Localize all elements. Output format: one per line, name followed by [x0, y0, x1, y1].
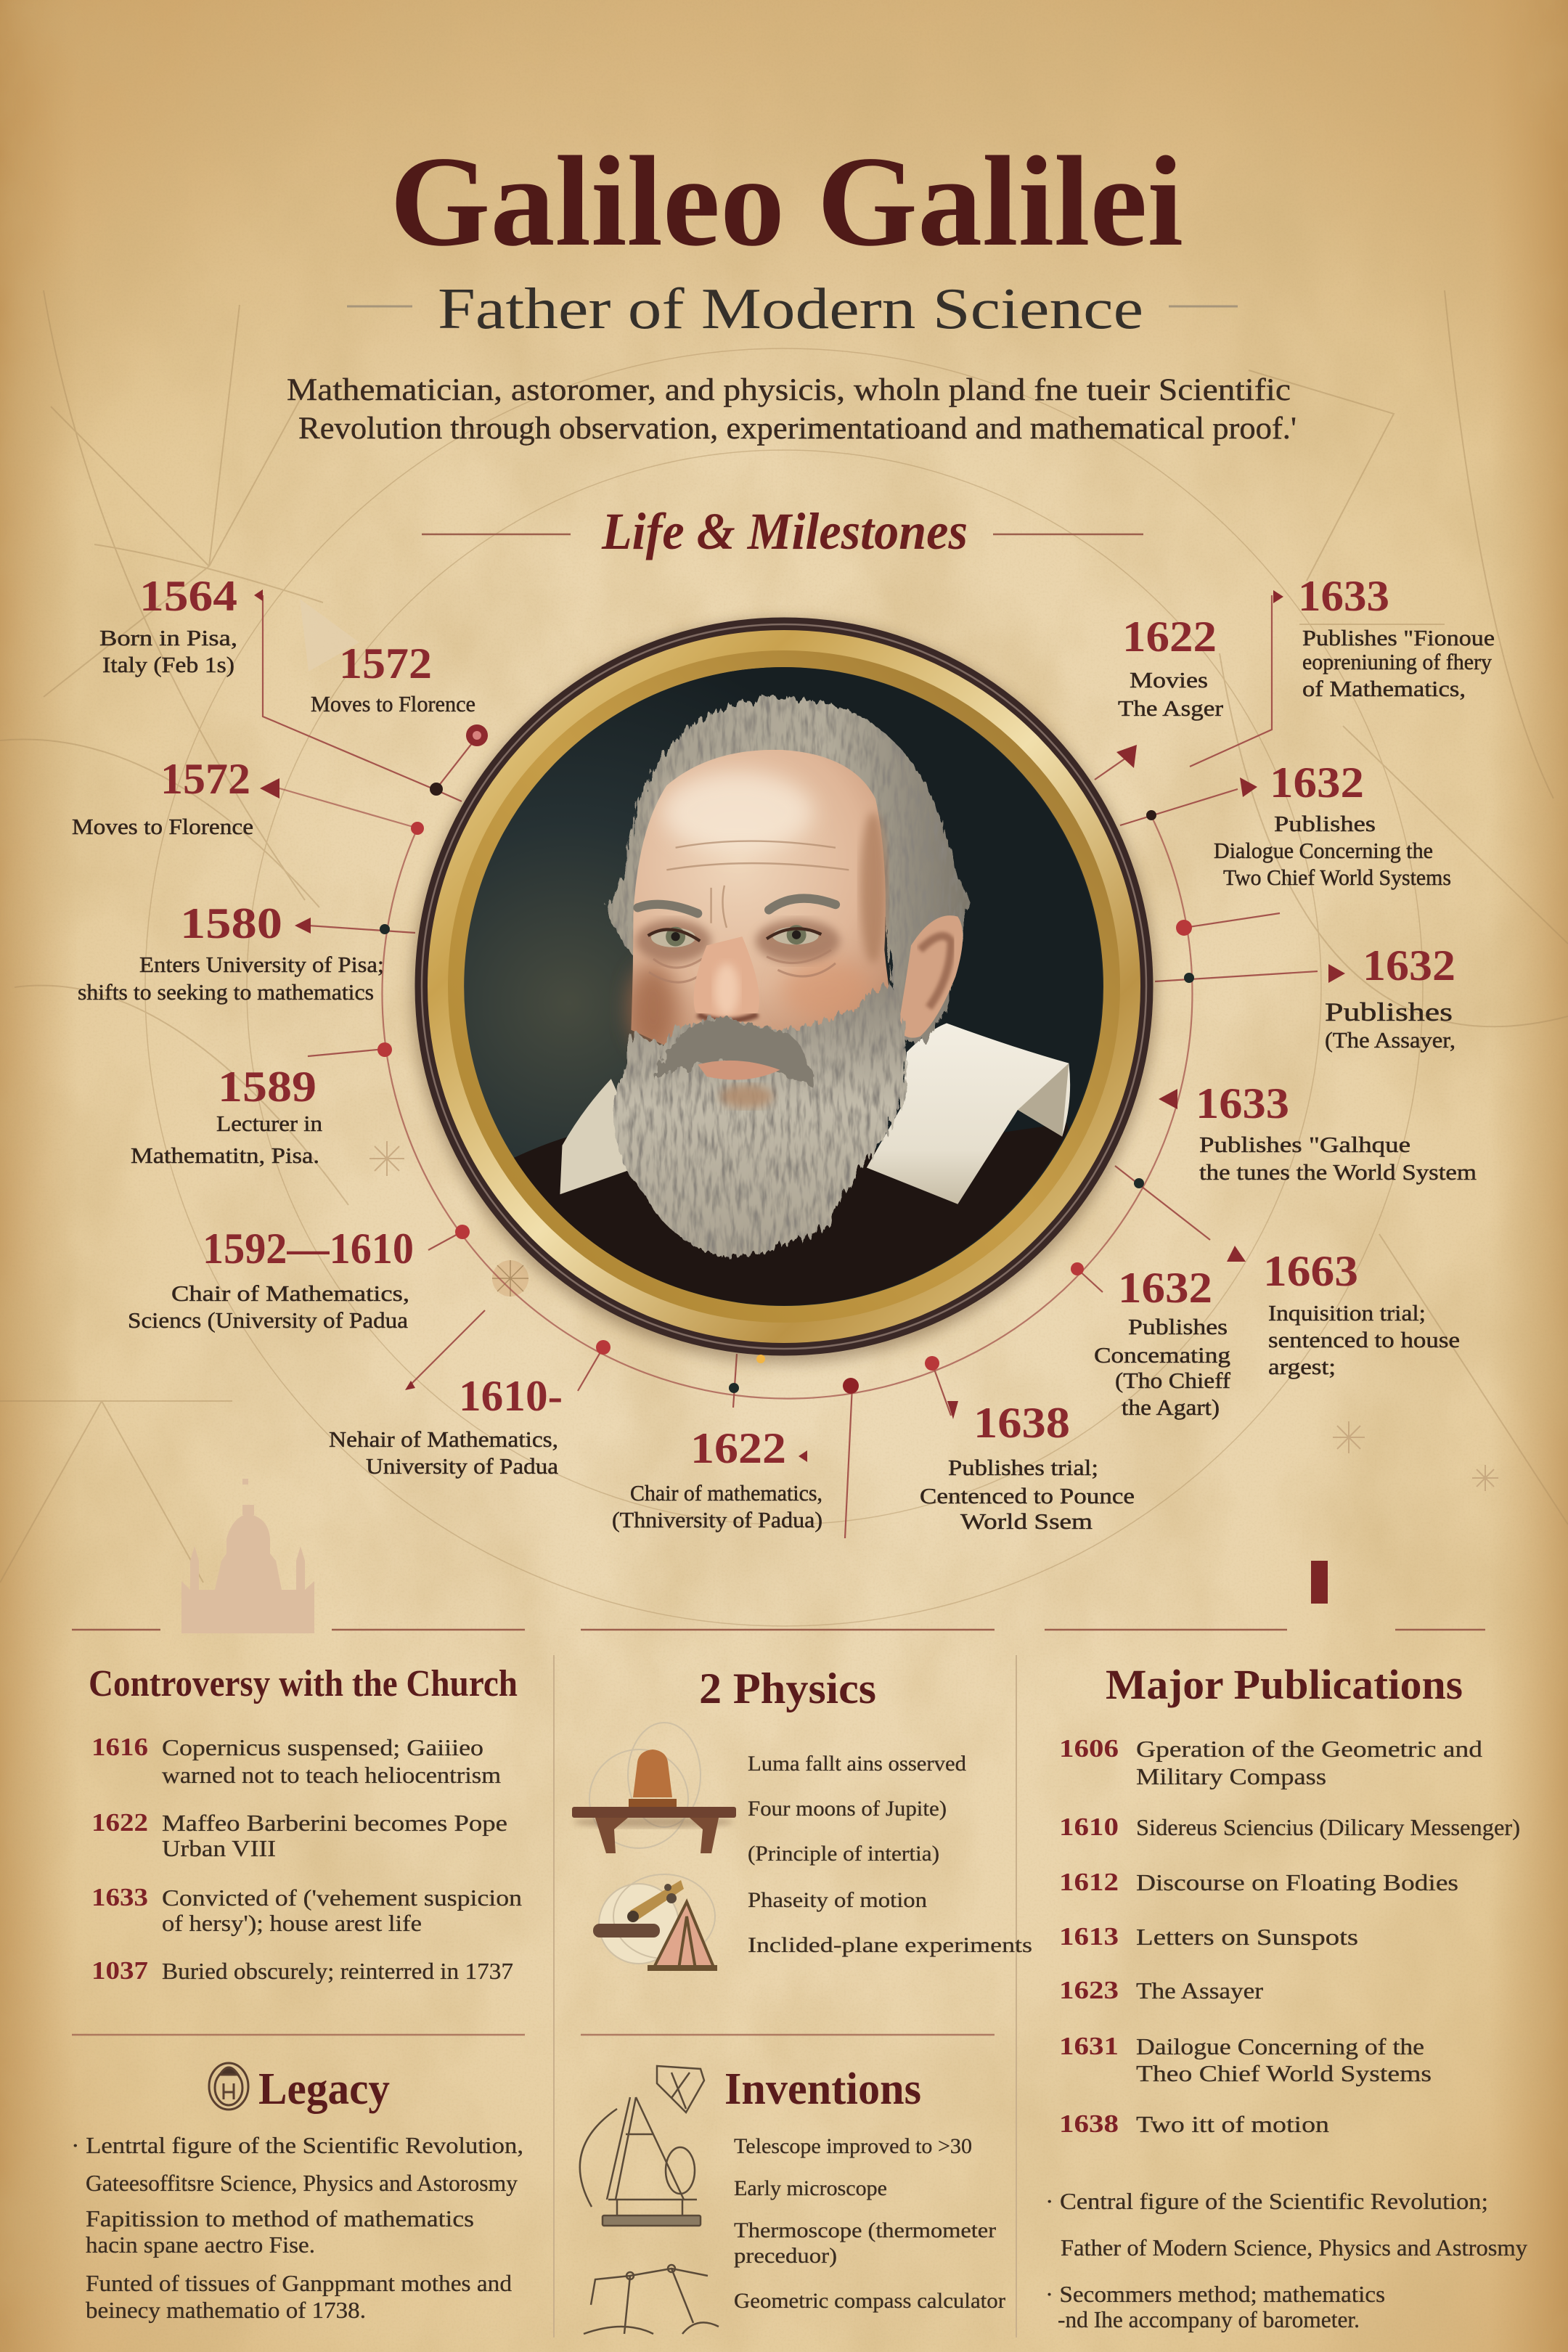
entry 1638: 1638 — [1059, 2110, 1119, 2138]
panel: controversy with the church — [89, 1663, 522, 1985]
milestone 1663: argest; — [1268, 1354, 1336, 1379]
milestone 1663: Inquisition trial; — [1268, 1300, 1426, 1326]
milestone 1633 top: eopreniuning of fhery — [1302, 649, 1492, 674]
entry 1633: 1633 — [91, 1883, 148, 1911]
physics list — [748, 1752, 1032, 1957]
portrait frame — [412, 620, 1156, 1363]
legacy text: Fapitission to method of mathematics — [86, 2205, 474, 2231]
milestone 1632 lower: 1632 — [1118, 1264, 1212, 1312]
milestone 1572 inner — [311, 640, 475, 716]
face — [631, 750, 898, 1083]
milestone 1580 — [78, 899, 384, 1005]
milestone 1564: Italy (Feb 1s) — [102, 652, 234, 677]
milestone 1622 top — [1118, 613, 1224, 721]
inner ear shade — [920, 936, 951, 1008]
publications notes: Father of Modern Science, Physics and Astrosmy — [1061, 2234, 1527, 2261]
icon: book — [1311, 1561, 1328, 1604]
entry 1622: Urban VIII — [162, 1835, 276, 1861]
physics list: Four moons of Jupite) — [748, 1797, 947, 1821]
robe — [480, 1123, 1129, 1350]
inventions list: Geometric compass calculator — [734, 2289, 1005, 2313]
heading: controversy: Controversy with the Church — [89, 1663, 518, 1704]
milestone 1632 lower: (Tho Chieff — [1115, 1368, 1231, 1393]
entry 1610: 1610 — [1059, 1813, 1119, 1841]
right eye — [767, 925, 821, 944]
milestone 1589 — [131, 1063, 323, 1168]
milestone 1564: 1564 — [139, 572, 237, 620]
entry 1622 — [91, 1808, 507, 1861]
entry 1612 — [1059, 1868, 1458, 1896]
entry 1606 — [1059, 1734, 1482, 1789]
entry 1616: Copernicus suspensed; Gaiiieo — [162, 1734, 483, 1760]
eyebrows — [638, 899, 836, 913]
milestone 1633 top — [1298, 572, 1495, 701]
milestone 1580: 1580 — [180, 899, 282, 947]
milestone 1610: 1610- — [459, 1372, 563, 1420]
section dividers — [72, 1630, 1485, 2337]
publications notes: -nd Ihe accompany of barometer. — [1058, 2306, 1360, 2332]
milestone 1633 top: Publishes "Fionoue — [1302, 625, 1495, 650]
entry 1616: warned not to teach heliocentrism — [162, 1762, 501, 1788]
physics list: (Principle of intertia) — [748, 1842, 939, 1866]
milestone 1580: Enters University of Pisa; — [139, 952, 384, 977]
milestone 1572: Moves to Florence — [72, 814, 253, 839]
milestone 1633 right: the tunes the World System — [1199, 1159, 1477, 1185]
physics list: Inclided-plane experiments — [748, 1933, 1032, 1957]
entry 1623: 1623 — [1059, 1976, 1119, 2004]
entry 1622: Maffeo Barberini becomes Pope — [162, 1810, 507, 1836]
legacy text: · Lentrtal figure of the Scientific Revolution, — [71, 2132, 523, 2158]
publications notes: · Central figure of the Scientific Revolution; — [1045, 2188, 1488, 2214]
milestone 1632 right — [1325, 942, 1455, 1053]
milestone 1632 lower: Concemating — [1094, 1342, 1230, 1368]
milestone 1592-1610 — [128, 1225, 414, 1333]
entry 1612: Discourse on Floating Bodies — [1136, 1869, 1458, 1895]
milestone 1622 top: 1622 — [1122, 613, 1217, 661]
milestone 1622 top: Movies — [1130, 667, 1208, 693]
entry 1037: Buried obscurely; reinterred in 1737 — [162, 1958, 513, 1984]
inventions list: Telescope improved to >30 — [734, 2134, 972, 2158]
entry 1631 — [1059, 2032, 1432, 2086]
icon: small instrument sketch — [657, 2066, 704, 2112]
entry 1037: 1037 — [91, 1956, 148, 1985]
milestone 1663 — [1263, 1247, 1460, 1379]
milestone 1632 lower: the Agart) — [1122, 1395, 1220, 1420]
ear — [898, 915, 963, 1038]
entry 1622: 1622 — [91, 1808, 148, 1837]
collar fold shading — [1018, 1063, 1069, 1137]
milestone 1580: shifts to seeking to mathematics — [78, 979, 374, 1005]
moustache — [653, 1016, 813, 1087]
left cheek shadow — [629, 963, 678, 1052]
panel: major publications — [1045, 1661, 1527, 2332]
heading: physics: 2 Physics — [699, 1665, 876, 1712]
milestone 1663: 1663 — [1263, 1247, 1358, 1295]
milestone 1632 right: (The Assayer, — [1325, 1027, 1455, 1053]
physics list: Phaseity of motion — [748, 1888, 927, 1912]
panel: inventions — [580, 2065, 1005, 2334]
heading: publications: Major Publications — [1106, 1661, 1463, 1708]
portrait background — [464, 667, 815, 1286]
milestone 1638: Centenced to Pounce — [920, 1483, 1135, 1508]
milestone 1632 lower: Publishes — [1128, 1314, 1228, 1339]
decorative paper fold and compass roses — [300, 599, 1498, 1491]
entry 1631: Dailogue Concerning of the — [1136, 2033, 1424, 2059]
lips — [698, 1061, 780, 1079]
left collar — [560, 1079, 649, 1194]
timeline nodes — [377, 724, 1194, 1394]
milestone 1622 bottom: (Thniversity of Padua) — [612, 1507, 822, 1532]
milestone 1633 right: Publishes "Galhque — [1199, 1132, 1410, 1157]
nose — [694, 936, 759, 1018]
milestone 1592-1610: Chair of Mathematics, — [171, 1281, 409, 1306]
milestone 1632 upper right: 1632 — [1270, 759, 1364, 807]
left eye — [648, 927, 700, 947]
entry 1613: Letters on Sunspots — [1136, 1924, 1358, 1950]
publications notes — [1045, 2188, 1527, 2332]
entry 1638 — [1059, 2110, 1329, 2138]
panel: physics — [572, 1665, 1032, 1971]
entry 1606: Gperation of the Geometric and — [1136, 1736, 1482, 1762]
icon: catapult instrument — [593, 1874, 717, 1971]
milestone 1638: Publishes trial; — [948, 1455, 1098, 1480]
intro paragraph: Revolution through observation, experimentatioand and mathematical proof.' — [298, 412, 1297, 446]
forehead wrinkles — [666, 841, 849, 928]
right cheek — [783, 959, 871, 1021]
heading: life and milestones: Life & Milestones — [601, 502, 968, 560]
icon: bell on shelf — [572, 1723, 736, 1853]
right collar — [867, 1024, 1070, 1204]
icon: compass sketch — [584, 2265, 719, 2334]
milestone 1572 — [72, 755, 253, 839]
entry 1610: Sidereus Sciencius (Dilicary Messenger) — [1136, 1814, 1520, 1840]
inventions list: Thermoscope (thermometer — [734, 2218, 996, 2242]
entry 1633: Convicted of ('vehement suspicion — [162, 1885, 522, 1911]
hair — [607, 698, 969, 1043]
milestone 1632 upper right: Two Chief World Systems — [1223, 865, 1451, 890]
icon: cathedral silhouette — [181, 1479, 314, 1633]
timeline arrowheads — [254, 0, 1345, 1462]
milestone 1610 — [329, 1372, 563, 1479]
milestone 1632 upper right — [1214, 759, 1451, 890]
milestone 1564: Born in Pisa, — [99, 625, 237, 650]
milestone 1572: 1572 — [160, 755, 250, 803]
milestone 1633 right — [1196, 1079, 1477, 1185]
entry 1631: 1631 — [1059, 2032, 1119, 2060]
milestone 1564 — [99, 572, 237, 677]
intro paragraph: Mathematician, astoromer, and physicis, wholn pland fne tueir Scientific — [287, 373, 1291, 407]
milestone 1589: Lecturer in — [216, 1111, 323, 1136]
forehead highlight — [662, 772, 813, 852]
legacy text: Funted of tissues of Ganppmant mothes and — [86, 2270, 512, 2296]
milestone 1632 right: 1632 — [1363, 942, 1455, 989]
nostril shade — [698, 1014, 758, 1021]
legacy text — [71, 2132, 523, 2323]
entry 1613: 1613 — [1059, 1922, 1119, 1951]
milestone 1589: 1589 — [218, 1063, 317, 1111]
legacy text: beinecy mathematio of 1738. — [86, 2297, 366, 2323]
entry 1616 — [91, 1733, 501, 1788]
entry 1612: 1612 — [1059, 1868, 1119, 1896]
entry 1623: The Assayer — [1136, 1977, 1263, 2004]
eye sockets — [635, 920, 840, 963]
entry 1613 — [1059, 1922, 1358, 1951]
milestone 1638 — [920, 1399, 1135, 1534]
milestone 1633 top: of Mathematics, — [1302, 676, 1466, 701]
entry 1633 — [91, 1883, 522, 1936]
milestone 1572 inner: 1572 — [339, 640, 432, 687]
timeline arc and leader lines — [263, 595, 1318, 1538]
milestone 1589: Mathematitn, Pisa. — [131, 1143, 319, 1168]
milestone 1632 upper right: Dialogue Concerning the — [1214, 838, 1433, 863]
beard — [613, 981, 907, 1257]
physics list: Luma fallt ains osserved — [748, 1752, 966, 1776]
milestone 1610: Nehair of Mathematics, — [329, 1426, 558, 1452]
subtitle: Father of Modern Science — [438, 277, 1143, 341]
entry 1633: of hersy'); house arest life — [162, 1910, 422, 1936]
milestone 1610: University of Padua — [366, 1453, 558, 1479]
icon: legacy crest — [209, 2063, 248, 2110]
nose highlight — [714, 963, 739, 1016]
portrait: Galileo — [464, 667, 1070, 1305]
milestone 1632 right: Publishes — [1325, 997, 1453, 1026]
milestone 1638: 1638 — [973, 1399, 1070, 1447]
milestone 1622 top: The Asger — [1118, 695, 1224, 721]
milestone 1622 bottom: 1622 — [690, 1424, 786, 1472]
intro paragraph — [287, 373, 1297, 446]
legacy text: hacin spane aectro Fise. — [86, 2231, 315, 2258]
milestone 1622 bottom — [612, 1424, 822, 1532]
chin — [720, 1085, 773, 1108]
entry 1616: 1616 — [91, 1733, 148, 1761]
temple shade — [860, 812, 886, 963]
title: Galileo Galilei — [390, 129, 1183, 273]
heading: legacy: Legacy — [258, 2065, 390, 2114]
inventions list: Early microscope — [734, 2176, 887, 2200]
milestone 1592-1610: 1592—1610 — [203, 1225, 414, 1273]
milestone 1632 lower — [1094, 1264, 1231, 1420]
milestone 1632 upper right: Publishes — [1274, 811, 1376, 836]
icon: telescope tripod sketch — [580, 2097, 701, 2226]
milestone 1663: sentenced to house — [1268, 1327, 1460, 1352]
entry 1638: Two itt of motion — [1136, 2111, 1329, 2137]
entry 1606: 1606 — [1059, 1734, 1119, 1763]
panel: legacy — [71, 2063, 523, 2323]
milestone 1638: World Ssem — [960, 1508, 1093, 1534]
entry 1623 — [1059, 1976, 1263, 2004]
milestone 1622 bottom: Chair of mathematics, — [630, 1480, 822, 1506]
heading: inventions: Inventions — [724, 2065, 921, 2114]
milestone 1633 top: 1633 — [1298, 572, 1389, 620]
inventions list: preceduor) — [734, 2244, 837, 2268]
milestone 1633 right: 1633 — [1196, 1079, 1289, 1127]
milestone 1592-1610: Sciencs (University of Padua — [128, 1307, 408, 1333]
legacy text: Gateesoffitsre Science, Physics and Astorosmy — [86, 2170, 518, 2196]
milestone 1572 inner: Moves to Florence — [311, 691, 475, 716]
publications notes: · Secommers method; mathematics — [1045, 2281, 1385, 2307]
entry 1606: Military Compass — [1136, 1763, 1326, 1789]
eye bags — [649, 950, 836, 982]
entry 1631: Theo Chief World Systems — [1136, 2060, 1432, 2086]
inventions list — [734, 2134, 1005, 2313]
